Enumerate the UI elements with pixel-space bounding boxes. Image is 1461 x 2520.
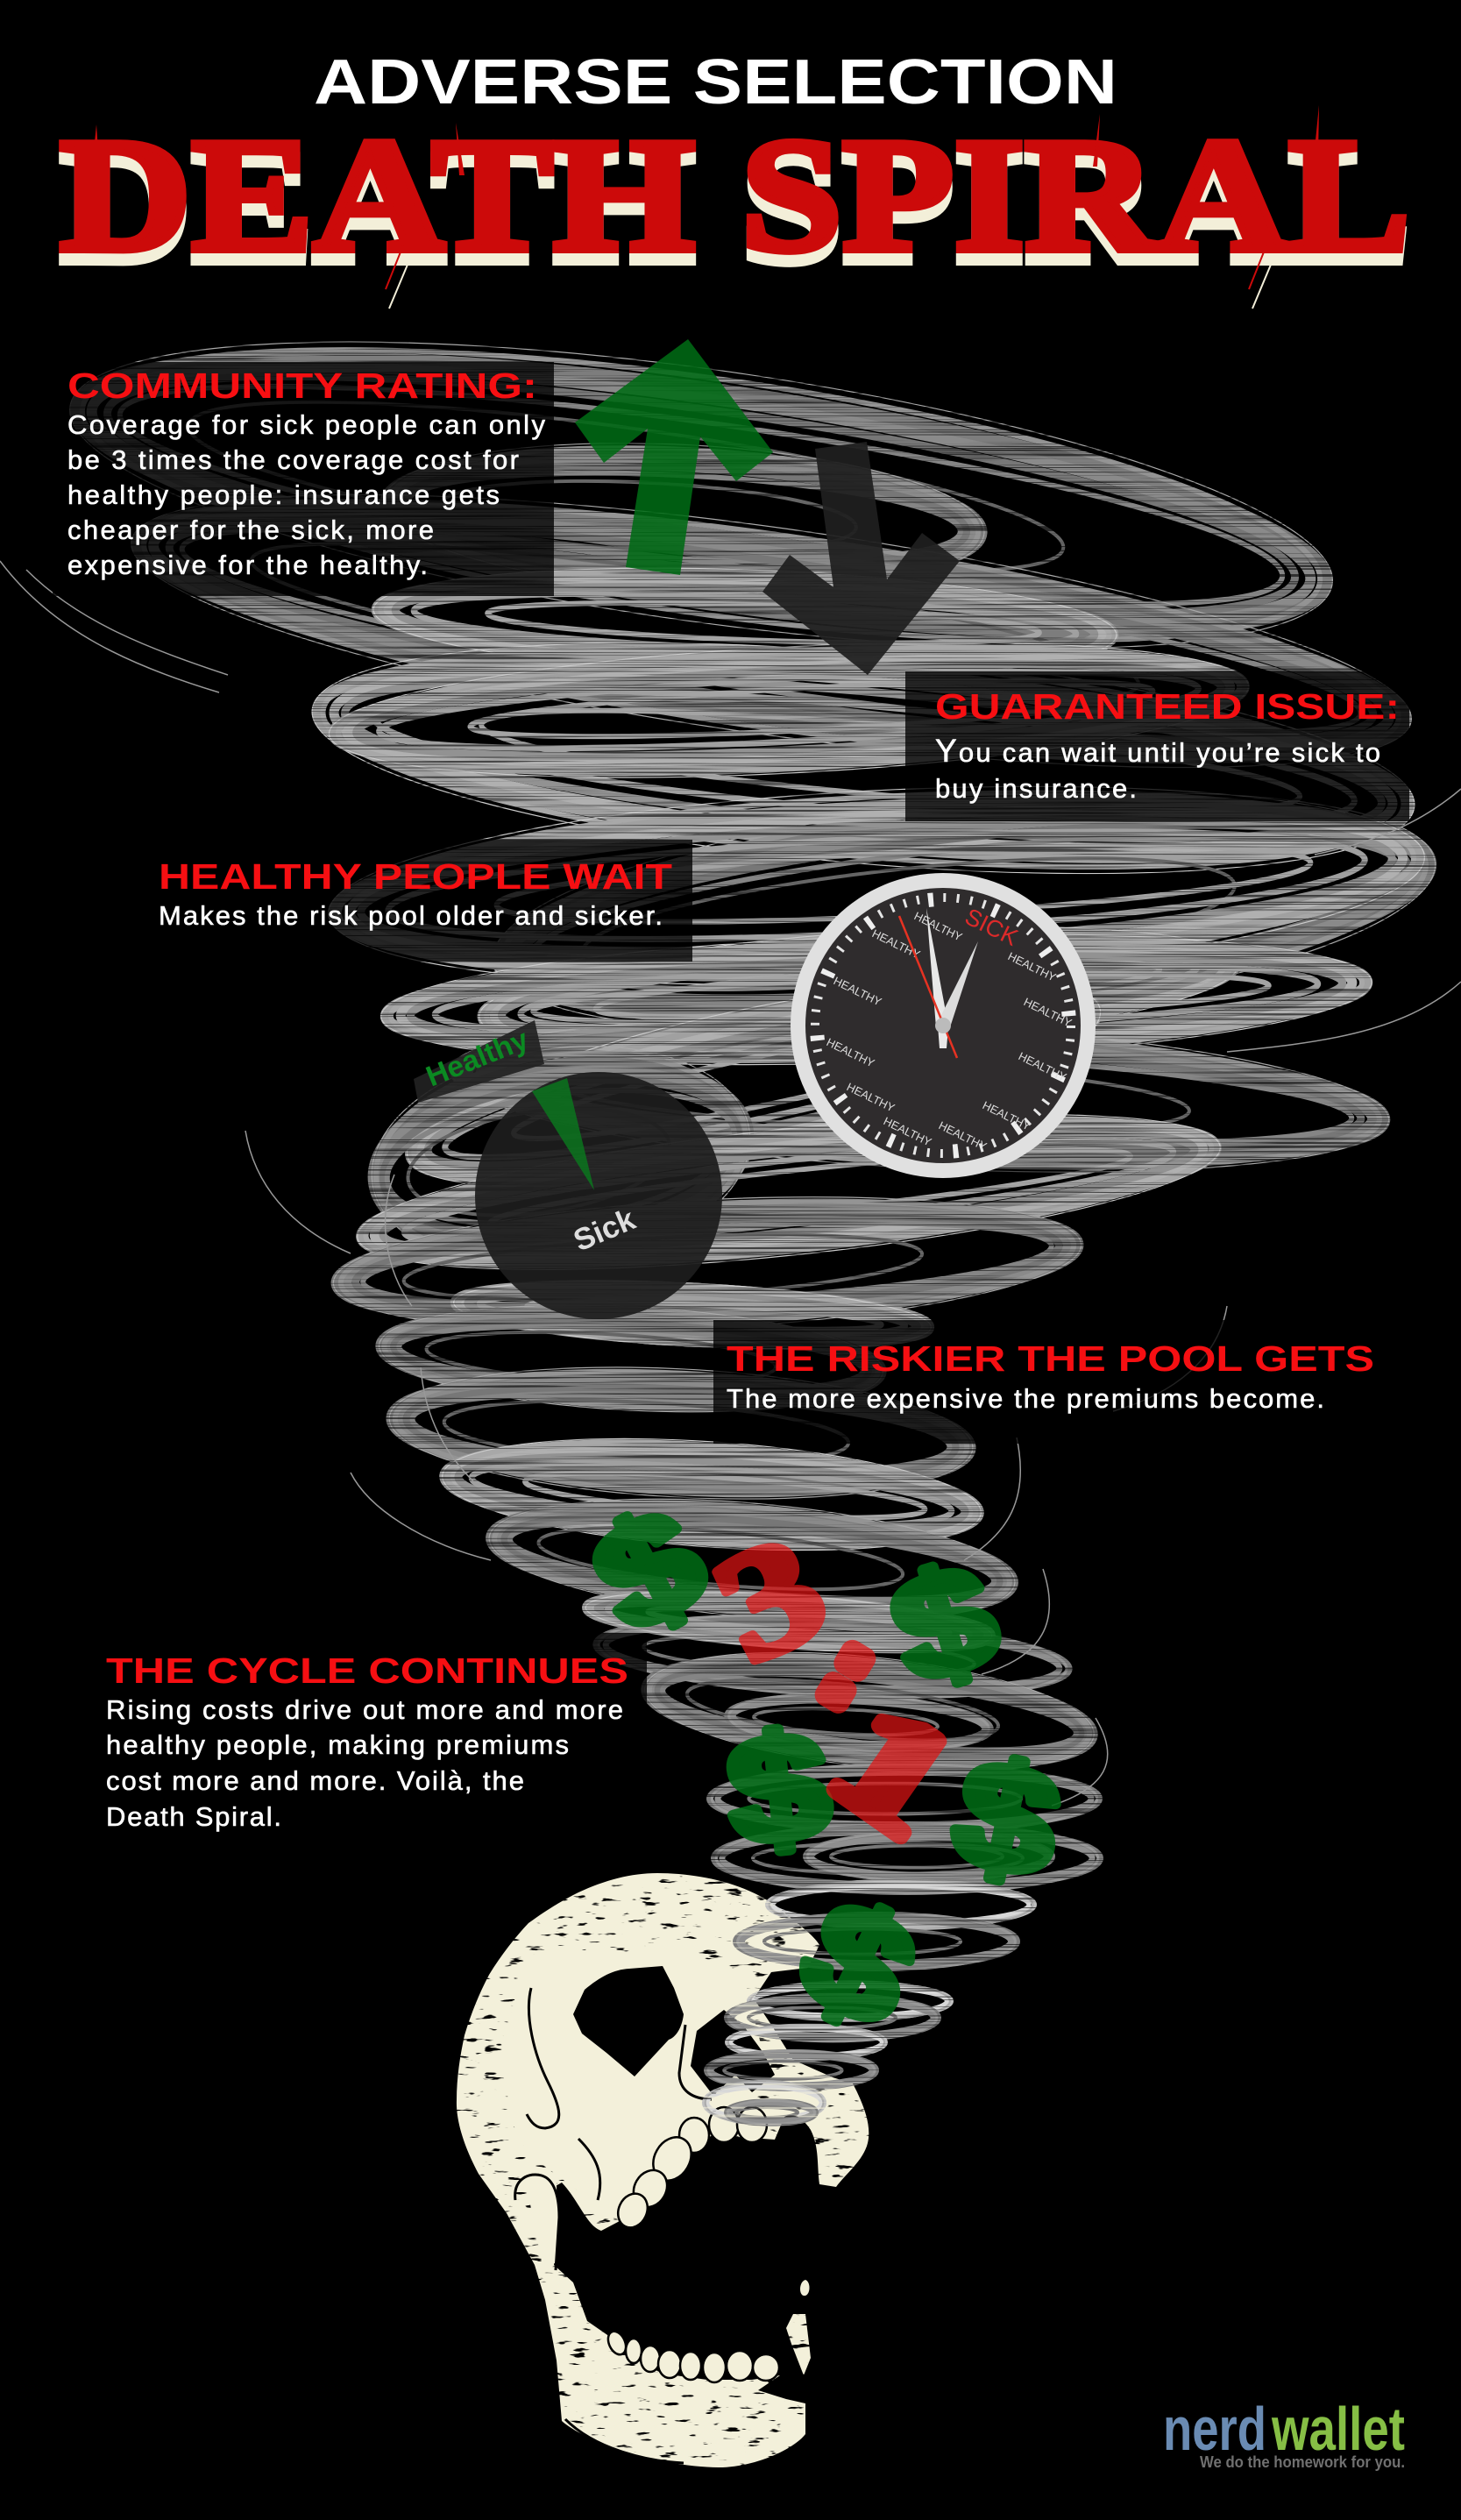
clock: HEALTHY	[1017, 1049, 1069, 1084]
pie slice: healthy	[532, 1078, 594, 1190]
clock label: sick: SICK	[961, 903, 1022, 951]
body: riskier pool: The more expensive the premiums become.	[727, 1383, 1324, 1414]
panel: healthy people wait	[138, 840, 692, 962]
tornado spiral	[53, 281, 1446, 2125]
dollar signs and 3:1 ratio	[568, 1475, 1073, 2059]
clock: HEALTHY	[845, 1080, 897, 1115]
body: healthy people wait: Makes the risk pool older and sicker.	[159, 900, 663, 931]
heading: healthy people wait: HEALTHY PEOPLE WAIT	[159, 856, 672, 897]
skull: eye socket	[573, 1966, 684, 2076]
body: community rating: Coverage for sick people can only	[67, 409, 545, 440]
icon: dollar sign 4: $	[941, 1726, 1073, 1910]
skull: upper teeth	[605, 2107, 779, 2382]
clock: HEALTHY	[832, 974, 884, 1009]
panel: riskier pool	[713, 1320, 1374, 1444]
body: community rating	[67, 409, 545, 580]
clock: HEALTHY	[981, 1098, 1033, 1133]
logo: nerdwallet: nerd	[1163, 2395, 1266, 2463]
ratio number 1: 1	[803, 1671, 985, 1869]
pie chart: healthy vs sick	[414, 1020, 722, 1319]
label: sick: Sick	[569, 1202, 641, 1258]
label band: healthy	[414, 1020, 544, 1103]
body: cycle continues	[106, 1694, 623, 1832]
logo: nerdwallet: wallet	[1271, 2395, 1405, 2463]
icon: dollar sign 5: $	[777, 1866, 940, 2059]
icon: dollar sign 1: $	[568, 1475, 729, 1664]
heading: riskier pool: THE RISKIER THE POOL GETS	[727, 1338, 1374, 1379]
ratio colon: :	[806, 1613, 893, 1726]
panel: cycle continues	[88, 1633, 647, 1843]
skull: nose socket	[691, 2010, 775, 2096]
arrow: down dark	[762, 442, 960, 675]
arrow: up green	[575, 339, 773, 575]
clock: HEALTHY	[882, 1114, 934, 1149]
clock: HEALTHY	[825, 1035, 877, 1070]
icon: dollar sign 3: $	[720, 1700, 836, 1877]
clock	[777, 860, 1109, 1191]
clock: HEALTHY	[912, 909, 965, 944]
clock: HEALTHY	[937, 1118, 989, 1154]
body: guaranteed issue: buy insurance.	[935, 773, 1137, 804]
logo: nerdwallet: We do the homework for you.	[1200, 2453, 1405, 2471]
body: cycle continues: Rising costs drive out more and more	[106, 1694, 623, 1725]
clock: HEALTHY	[870, 926, 923, 962]
clock hands	[899, 908, 978, 1058]
title: death spiral: DEATH SPIRAL	[60, 117, 1410, 298]
heading: cycle continues: THE CYCLE CONTINUES	[106, 1650, 628, 1691]
skull	[457, 1873, 869, 2467]
tornado wisps	[0, 561, 1461, 1806]
skull: clean face area	[500, 1950, 762, 2218]
body: guaranteed issue: You can wait until you’re sick to	[935, 733, 1380, 769]
body: community rating: expensive for the healthy.	[67, 550, 428, 580]
clock: HEALTHY	[1006, 949, 1059, 984]
title: death spiral: DEATH SPIRAL	[60, 105, 1410, 286]
clock: HEALTHY	[1022, 995, 1074, 1030]
title: adverse selection: ADVERSE SELECTION	[314, 47, 1117, 117]
body: cycle continues: Death Spiral.	[106, 1801, 281, 1832]
body: cycle continues: healthy people, making premiums	[106, 1729, 569, 1760]
body: community rating: healthy people: insurance gets	[67, 479, 500, 510]
heading: community rating: COMMUNITY RATING:	[67, 366, 537, 406]
ratio number 3: 3	[691, 1501, 849, 1695]
logo: nerdwallet	[1163, 2395, 1405, 2471]
heading: guaranteed issue: GUARANTEED ISSUE:	[935, 686, 1400, 727]
icon: dollar sign 2: $	[875, 1532, 1014, 1714]
body: community rating: be 3 times the coverage cost for	[67, 444, 519, 475]
label: healthy: Healthy	[422, 1022, 533, 1092]
body: community rating: cheaper for the sick, more	[67, 515, 434, 545]
body: cycle continues: cost more and more. Voilà, the	[106, 1765, 524, 1796]
body: guaranteed issue	[935, 733, 1380, 804]
panel: guaranteed issue	[905, 671, 1409, 821]
panel: community rating	[53, 362, 554, 596]
